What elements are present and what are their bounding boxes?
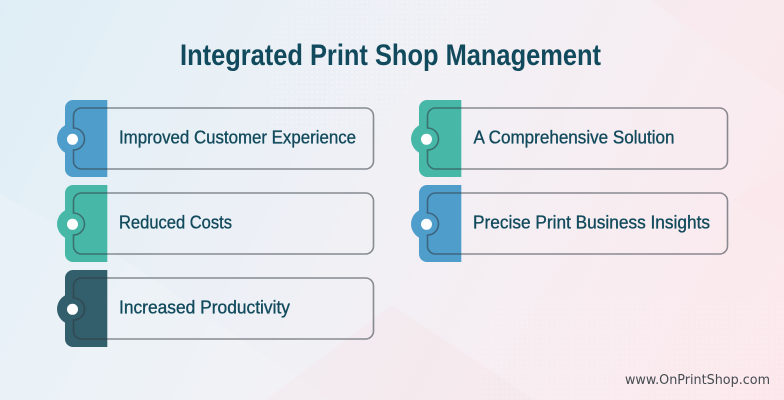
label: Increased Productivity: [119, 296, 291, 318]
tab: blue: [419, 185, 461, 262]
label: Precise Print Business Insights: [473, 212, 710, 232]
node circle: [57, 124, 88, 154]
card: Precise Print Business Insights: [411, 185, 728, 262]
node dot: [421, 134, 432, 145]
tab: teal: [65, 185, 107, 262]
website url: www.OnPrintShop.com: [625, 372, 770, 388]
label: Improved Customer Experience: [119, 126, 356, 148]
node circle: [57, 208, 88, 240]
label: A Comprehensive Solution: [474, 126, 674, 148]
card outline: [428, 193, 728, 254]
node dot: [67, 134, 78, 145]
node circle: [411, 208, 442, 240]
card outline: [74, 108, 374, 169]
node circle: [57, 294, 88, 324]
card: Improved Customer Experience: [57, 100, 374, 177]
node dot: [67, 219, 78, 230]
node dot: [421, 219, 432, 230]
card: A Comprehensive Solution: [411, 100, 728, 177]
node dot: [67, 304, 78, 315]
title: Integrated Print Shop Management: [180, 39, 601, 72]
card outline: [74, 278, 374, 339]
card: Increased Productivity: [57, 270, 374, 347]
card outline: [74, 193, 374, 254]
card: Reduced Costs: [57, 185, 374, 262]
card outline: [428, 108, 728, 169]
tab: dark teal: [65, 270, 107, 347]
tab: blue: [65, 100, 107, 177]
tab: teal: [419, 100, 461, 177]
label: Reduced Costs: [119, 212, 232, 232]
node circle: [411, 124, 442, 154]
